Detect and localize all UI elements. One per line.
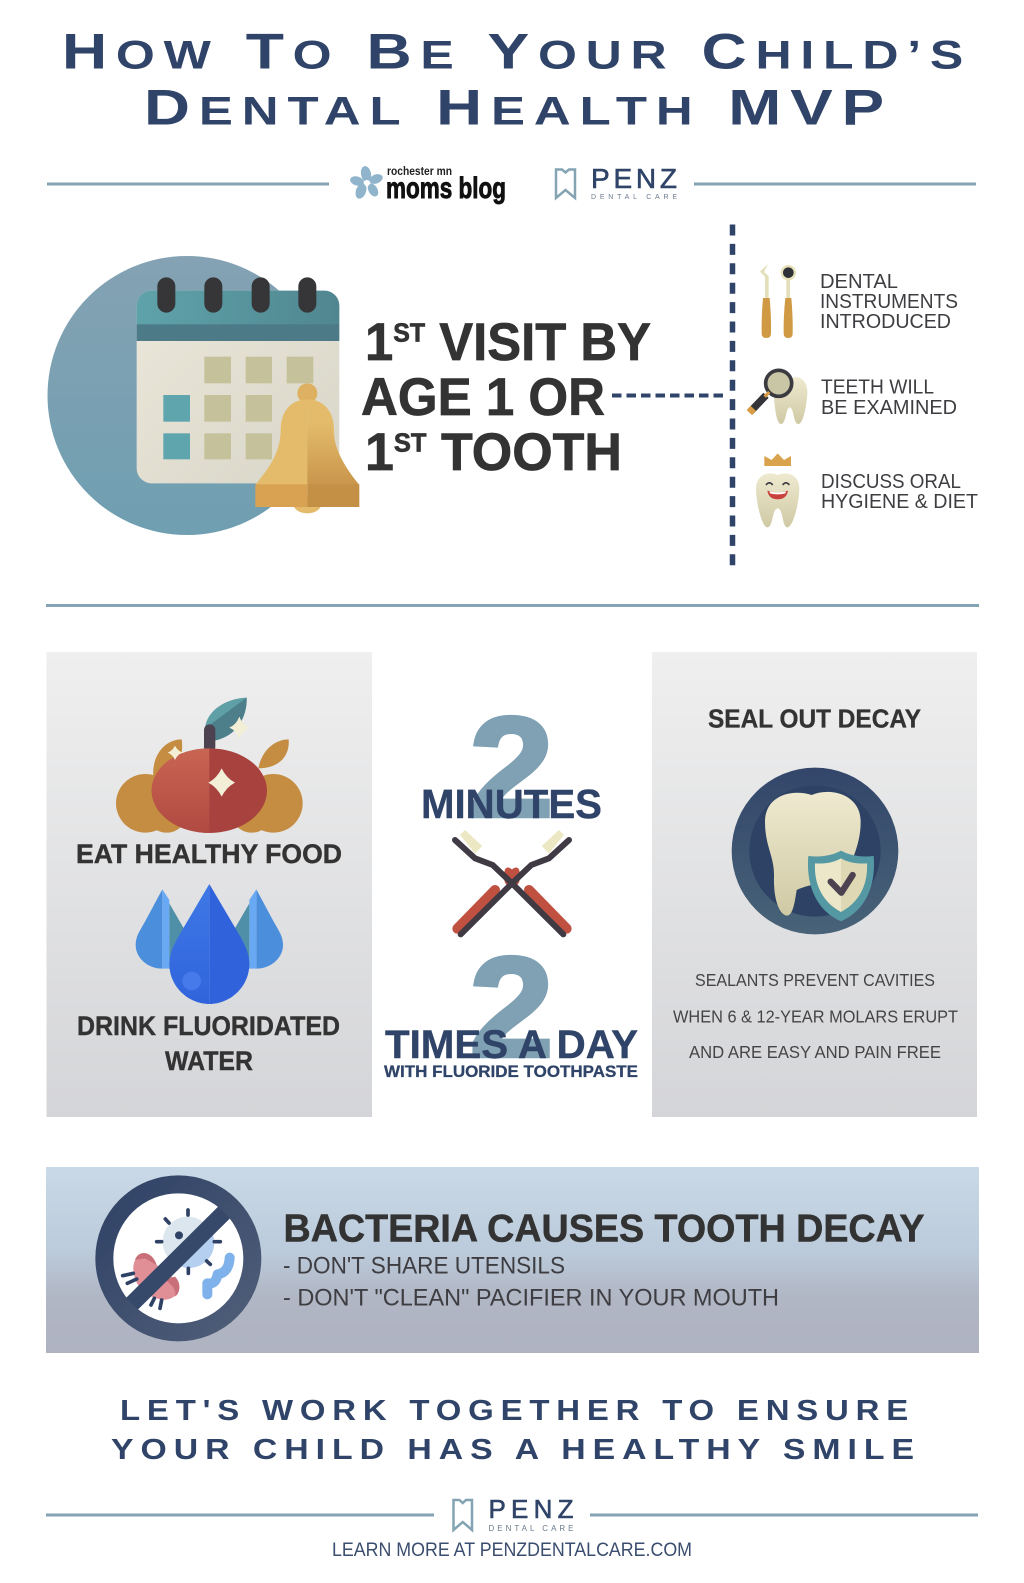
dashed vertical line	[730, 224, 735, 568]
label: drink fluoridated water	[77, 1011, 340, 1076]
text: sealants description: WHEN 6 & 12-YEAR MOLARS ERUPT	[673, 1006, 958, 1026]
headline: first visit: 1	[365, 313, 394, 372]
heading: bacteria causes tooth decay: BACTERIA CAUSES TOOTH DECAY	[284, 1208, 924, 1250]
closing message	[111, 1395, 921, 1466]
text: bacteria tips	[283, 1252, 779, 1312]
text: oral hygiene: HYGIENE & DIET	[821, 490, 978, 513]
headline: first visit: TOOTH	[427, 423, 622, 482]
icon: dental instruments	[760, 264, 796, 338]
text: dental instruments: INTRODUCED	[820, 310, 951, 333]
dashed connector	[612, 394, 724, 398]
calendar day squares	[163, 357, 313, 459]
big number 2 bottom: 2	[469, 928, 554, 1088]
title	[62, 24, 972, 136]
calendar sheet	[137, 291, 339, 483]
text: bacteria tips: - DON'T "CLEAN" PACIFIER IN YOUR MOUTH	[283, 1284, 779, 1312]
footer divider right	[590, 1514, 978, 1516]
panel: bacteria banner	[46, 1167, 979, 1353]
text: sealants description: SEALANTS PREVENT CAVITIES	[695, 970, 935, 990]
footer logo: Penz Dental Care: PENZ	[488, 1494, 574, 1524]
logo: rochester mn moms blog: moms blog	[386, 172, 506, 205]
footer logo: Penz Dental Care: DENTAL CARE	[488, 1524, 574, 1533]
headline: first visit: AGE 1 OR	[361, 368, 605, 427]
panel: seal out decay	[652, 652, 977, 1117]
headline: first visit: 1	[365, 423, 394, 482]
text: dental instruments: DENTAL	[820, 270, 898, 293]
text: bacteria tips: - DON'T SHARE UTENSILS	[283, 1252, 565, 1280]
title: D ENTAL H EALTH MVP	[144, 80, 893, 136]
icon: crossed toothbrushes	[455, 830, 569, 934]
panel: healthy food and water	[46, 652, 372, 1117]
footer logo: Penz Dental Care	[454, 1494, 574, 1533]
headline: first visit: ST	[393, 318, 425, 348]
label: minutes: MINUTES	[421, 781, 602, 827]
header divider left	[47, 182, 329, 186]
text: teeth examined: TEETH WILL	[821, 376, 934, 398]
logo: Penz Dental Care: DENTAL CARE	[591, 194, 677, 201]
icon: water drops	[136, 884, 283, 1004]
icon: tooth with shield	[732, 768, 898, 934]
text: sealants description	[673, 970, 958, 1062]
checklist: first visit items	[749, 264, 978, 527]
icon: no bacteria sign	[104, 1184, 252, 1332]
footer divider left	[46, 1514, 434, 1516]
calendar header	[137, 291, 339, 325]
label: drink fluoridated water: DRINK FLUORIDATED	[77, 1011, 340, 1041]
text: dental instruments: INSTRUMENTS	[820, 290, 958, 313]
label: eat healthy food: EAT HEALTHY FOOD	[76, 839, 342, 869]
logo: rochester mn moms blog	[349, 164, 506, 205]
headline: first visit	[361, 313, 651, 482]
label: with fluoride toothpaste: WITH FLUORIDE TOOTHPASTE	[384, 1062, 638, 1081]
icon: smiling tooth with crown	[756, 453, 799, 527]
footer link text: LEARN MORE AT PENZDENTALCARE.COM	[332, 1540, 692, 1561]
bell	[255, 383, 359, 513]
logo: Penz Dental Care	[556, 163, 677, 201]
label: times a day: TIMES A DAY	[385, 1023, 638, 1067]
text: oral hygiene: DISCUSS ORAL	[821, 470, 961, 493]
headline: first visit: VISIT BY	[425, 313, 651, 372]
closing message: LET'S WORK TOGETHER TO ENSURE	[120, 1395, 915, 1427]
text: oral hygiene	[821, 470, 978, 513]
icon: calendar with bell	[48, 256, 359, 535]
logo: rochester mn moms blog: rochester mn	[387, 164, 452, 178]
big number 2 top: 2	[469, 688, 554, 848]
calendar rings	[157, 277, 316, 313]
heading: seal out decay: SEAL OUT DECAY	[708, 706, 921, 734]
text: teeth examined	[821, 376, 957, 419]
calendar band	[137, 324, 339, 341]
title: H OW T O B E Y OUR C HILD’S	[62, 24, 972, 80]
section divider	[46, 604, 979, 607]
text: dental instruments	[820, 270, 958, 333]
logo: Penz Dental Care: PENZ	[591, 163, 677, 194]
label: drink fluoridated water: WATER	[165, 1046, 253, 1076]
text: teeth examined: BE EXAMINED	[821, 396, 957, 419]
icon: apple and oranges	[116, 698, 303, 833]
headline: first visit: ST	[394, 428, 427, 458]
icon: magnifier and tooth	[749, 370, 807, 424]
panel: two minutes two times a day	[384, 688, 638, 1088]
closing message: YOUR CHILD HAS A HEALTHY SMILE	[111, 1434, 921, 1466]
text: sealants description: AND ARE EASY AND PAIN FREE	[689, 1042, 941, 1062]
header divider right	[694, 182, 976, 186]
